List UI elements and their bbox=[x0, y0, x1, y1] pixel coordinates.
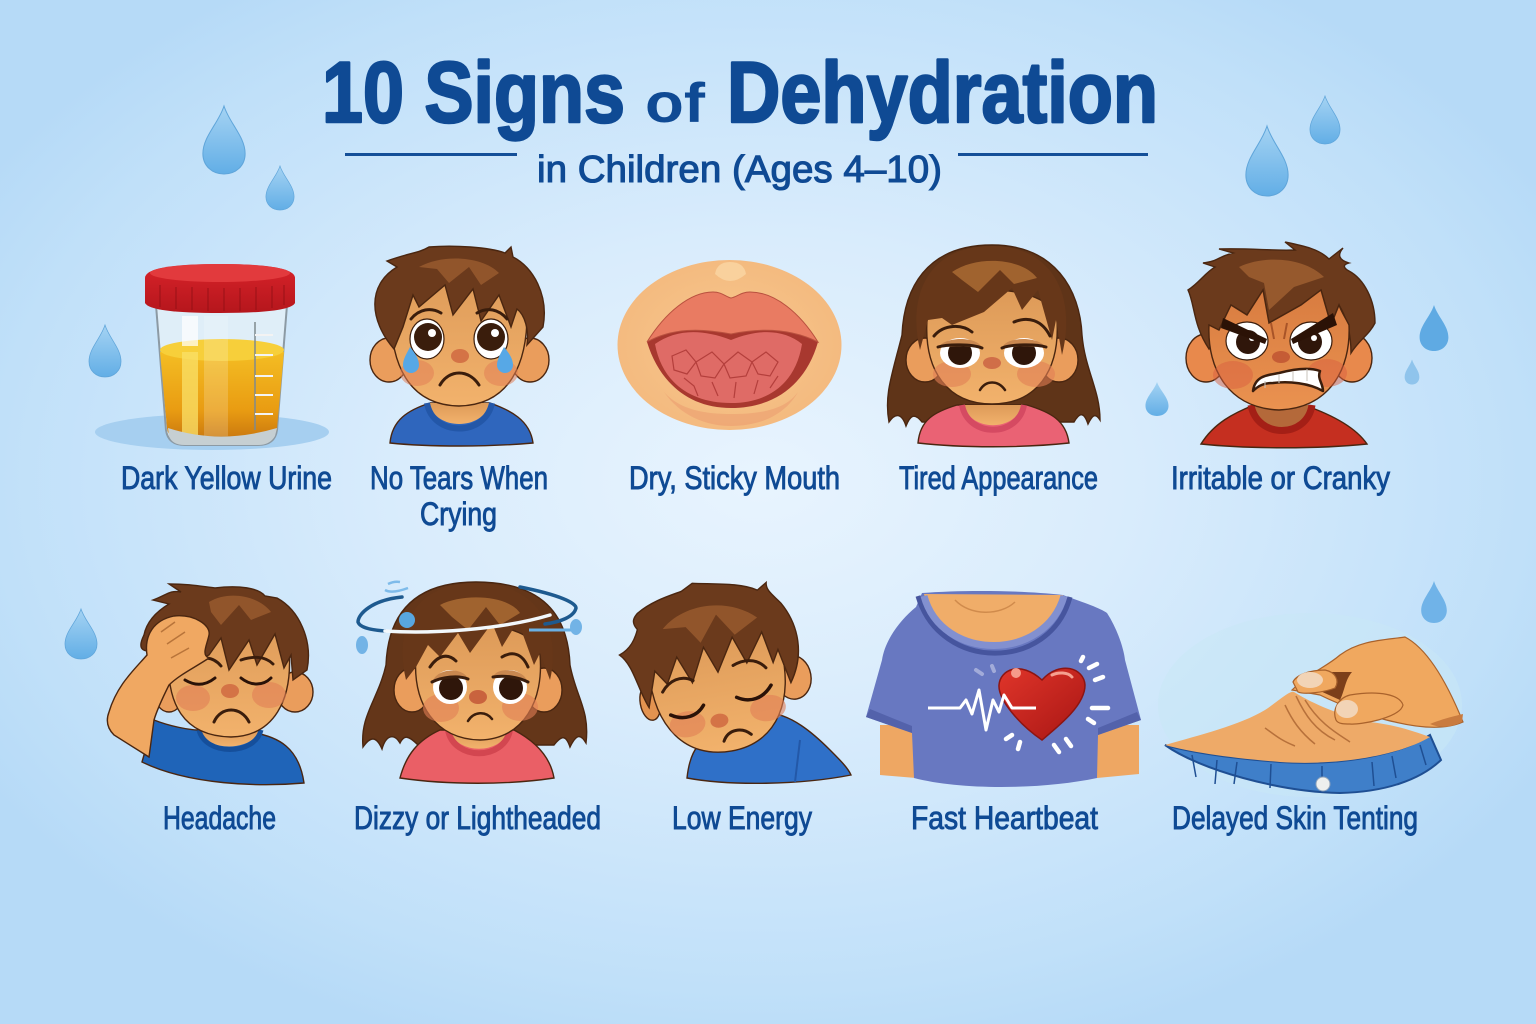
title: 10 Signs bbox=[322, 45, 625, 141]
icon: water drop bbox=[1145, 382, 1169, 416]
title: Dehydration bbox=[727, 45, 1158, 141]
title: of bbox=[645, 71, 705, 134]
icon: skin tenting bbox=[1158, 613, 1463, 797]
subtitle with rules: in Children (Ages 4–10) bbox=[537, 149, 942, 191]
icon: water drop bbox=[203, 106, 245, 174]
icon: water drop bbox=[266, 166, 294, 210]
icon: crying boy bbox=[370, 246, 549, 446]
icon: urine sample cup bbox=[95, 264, 329, 450]
subtitle with rules bbox=[345, 149, 1148, 191]
icon: water drop bbox=[1421, 581, 1447, 623]
label: Delayed Skin Tenting bbox=[1172, 800, 1418, 836]
icon: boy with headache bbox=[107, 584, 313, 785]
icon: water drop bbox=[65, 609, 97, 659]
icon: low energy boy bbox=[609, 566, 851, 783]
icon: dizzy swirl bbox=[356, 582, 582, 654]
label: No Tears When bbox=[370, 460, 548, 496]
icon: water drop bbox=[89, 325, 121, 377]
label: Dry, Sticky Mouth bbox=[629, 460, 840, 496]
label: Low Energy bbox=[672, 800, 812, 836]
label: Fast Heartbeat bbox=[911, 800, 1098, 836]
label: Tired Appearance bbox=[899, 460, 1098, 496]
icon: irritable boy bbox=[1186, 242, 1375, 448]
label: Dizzy or Lightheaded bbox=[354, 800, 601, 836]
label: Dark Yellow Urine bbox=[121, 460, 332, 496]
icon: dry sticky mouth bbox=[618, 260, 842, 430]
icon: dizzy girl bbox=[363, 582, 587, 783]
icon: water drop bbox=[1310, 96, 1340, 144]
label: Crying bbox=[420, 496, 497, 532]
icon: tired girl bbox=[887, 245, 1100, 447]
title bbox=[322, 45, 1158, 141]
icon: water drop bbox=[1420, 305, 1448, 351]
icon: fast heartbeat shirt bbox=[866, 591, 1141, 787]
icon: water drop bbox=[1405, 360, 1419, 384]
icon: water drop bbox=[1246, 126, 1288, 196]
label bbox=[370, 460, 548, 532]
label: Irritable or Cranky bbox=[1171, 460, 1390, 496]
label: Headache bbox=[163, 800, 276, 836]
